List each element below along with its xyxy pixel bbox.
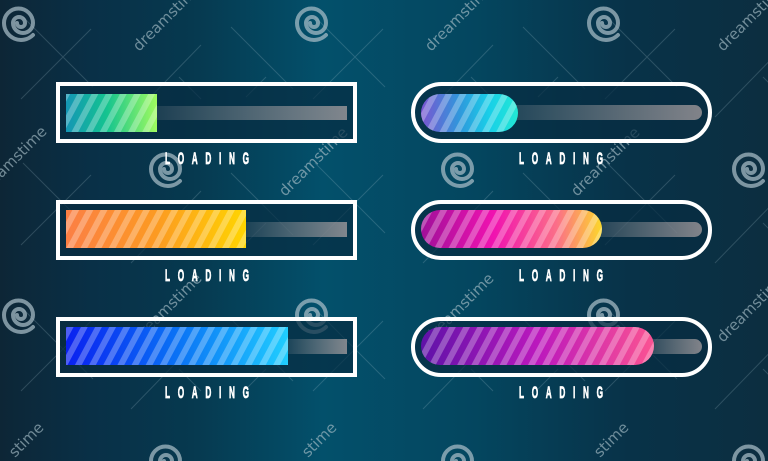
pill bar 1: [413, 84, 710, 141]
label: loading 6: LOADING: [519, 383, 603, 402]
watermark text: dreamstime: [275, 123, 352, 200]
pill bar 2: [413, 202, 710, 258]
label: loading 2: LOADING: [165, 266, 249, 285]
rectangular bar 3: [58, 319, 355, 375]
pill bar 3: [413, 319, 710, 375]
watermark text: dreamstime: [567, 123, 644, 200]
rectangular bar 1: [58, 84, 355, 141]
watermark text: stime: [298, 419, 340, 461]
rectangular bar 2: [58, 202, 355, 258]
watermark text: dreamstime: [421, 269, 498, 346]
watermark text: stime: [5, 419, 47, 461]
label: loading 1: LOADING: [165, 149, 249, 168]
label: loading 3: LOADING: [165, 383, 249, 402]
label: loading 5: LOADING: [519, 266, 603, 285]
watermark text: stime: [590, 419, 632, 461]
label: loading 4: LOADING: [519, 149, 603, 168]
watermark text: dreamstime: [129, 269, 206, 346]
